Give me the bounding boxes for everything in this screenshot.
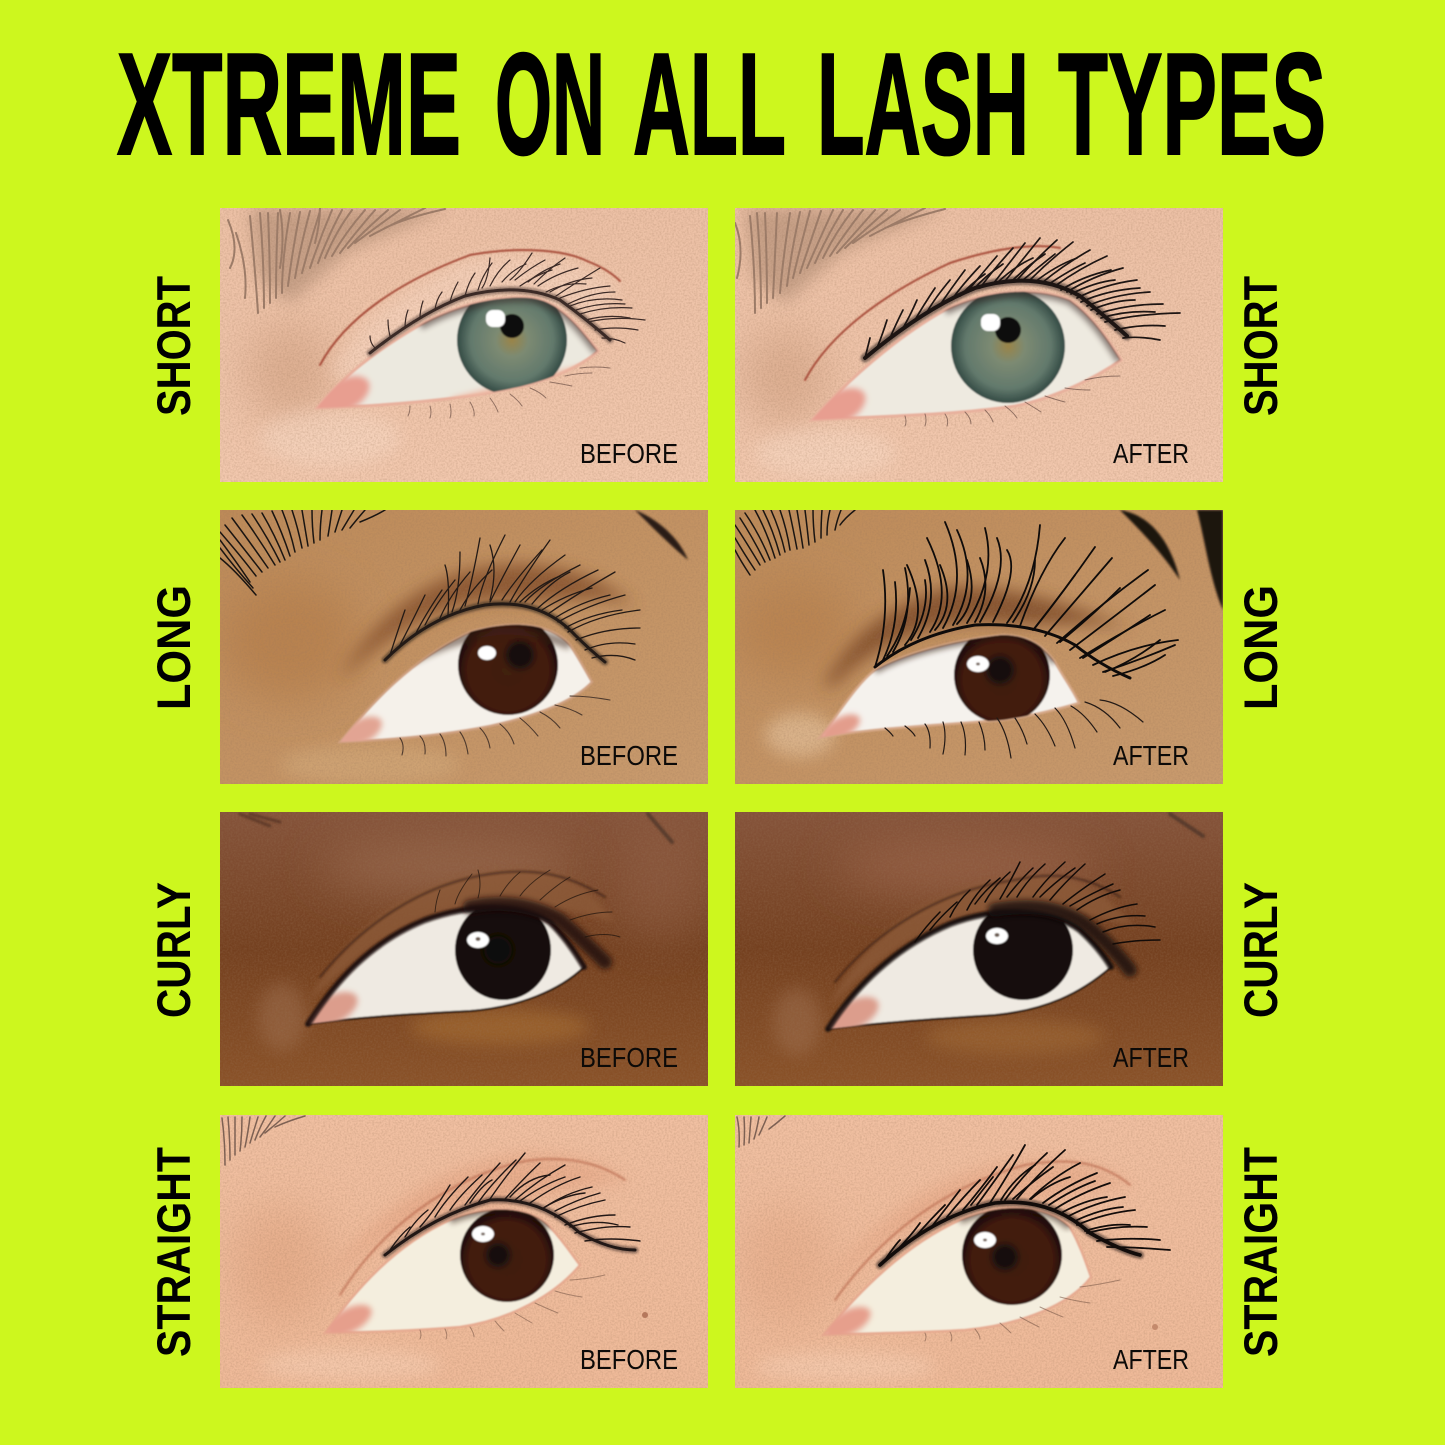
lower lashes [408,367,610,418]
upper lashes [385,535,640,662]
eye [810,290,1122,422]
side label: short right: SHORT [1234,276,1287,416]
brow hint [1170,814,1203,836]
side label: long right: LONG [1234,585,1287,710]
mole [642,1312,648,1318]
panel: long lashes before [220,510,708,784]
eye [826,913,1112,1030]
title: ON [495,23,605,185]
upper lashes [308,870,620,1024]
eyelid [828,877,1135,1007]
eyelid crease [805,246,1060,380]
lower lashes [905,376,1120,426]
eyebrow [735,510,855,575]
side label: short left: SHORT [147,276,200,416]
crease [320,872,605,977]
brow right [635,510,688,560]
panel: long lashes after [735,510,1223,784]
eyelid crease [320,250,620,365]
lower lashes [400,696,610,756]
lower lashes [885,700,1143,758]
brow right [1120,510,1180,580]
eyebrow [220,510,385,595]
side label: straight left: STRAIGHT [147,1147,200,1357]
eyebrow [228,208,450,313]
brow hint [240,814,280,826]
side label: long left: LONG [147,585,200,710]
lower lashes [925,1280,1120,1341]
upper lashes [385,1153,640,1255]
after label: AFTER [1113,1042,1189,1073]
eyelid [308,870,615,1002]
panel: straight lashes after [735,1115,1223,1388]
after label: AFTER [1113,740,1189,771]
upper lashes [370,253,645,353]
eyebrow [737,1116,785,1147]
eyebrow [222,1116,305,1165]
eyelid crease [835,1162,1130,1300]
upper lashes [865,238,1180,358]
panel: short lashes before [220,208,708,482]
title: LASH [817,23,1029,185]
panel: short lashes after [735,208,1223,482]
before label: BEFORE [580,1042,678,1073]
upper lashes [880,1145,1170,1265]
upper lashes [875,522,1178,678]
side label: straight right: STRAIGHT [1234,1147,1287,1357]
side label: curly right: CURLY [1234,882,1287,1018]
upper lashes [828,862,1160,1029]
after label: AFTER [1113,438,1189,469]
after label: AFTER [1113,1344,1189,1375]
before label: BEFORE [580,438,678,469]
mole [1152,1324,1158,1330]
eye [819,633,1081,738]
eyebrow [735,208,945,313]
dark edge right [1197,510,1223,610]
eyelid crease [340,1159,625,1295]
title: XTREME [117,23,461,185]
side label: curly left: CURLY [147,882,200,1018]
eye [306,909,584,1026]
before label: BEFORE [580,740,678,771]
lower lashes [420,1275,605,1339]
title: ALL [633,23,786,185]
eye [315,296,600,410]
title [117,23,1326,185]
eye [319,1208,580,1344]
before label: BEFORE [580,1344,678,1375]
panel: straight lashes before [220,1115,708,1388]
eyelid crease [835,876,1120,982]
brow hint right [648,814,672,842]
panel: curly lashes before [220,812,708,1086]
eye [338,623,594,744]
eye [818,1205,1091,1346]
panel: curly lashes after [735,812,1223,1086]
